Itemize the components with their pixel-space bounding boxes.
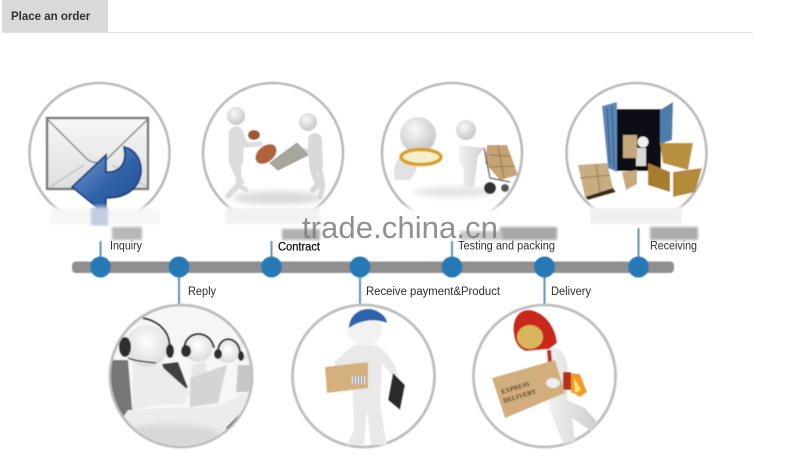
blurred white fade under top circles	[20, 203, 720, 227]
icon: laptops and desk	[123, 364, 251, 446]
icon: jetpack flame	[563, 372, 587, 397]
page header	[2, 0, 753, 32]
icon: document clipboard	[270, 143, 308, 170]
redacted smudges above the labels	[50, 208, 698, 240]
figure: worker with hand truck	[456, 120, 518, 194]
panel: Receive payment circle with courier	[292, 305, 434, 447]
figure: courier	[334, 309, 398, 445]
icon: chairs	[110, 360, 188, 416]
timeline labels: Contract	[278, 242, 321, 254]
figure: agents with headsets	[126, 325, 251, 410]
timeline nodes	[90, 256, 649, 278]
panel: Delivery circle with jetpack courier	[474, 305, 616, 447]
panel: Contract circle with two figures	[203, 83, 343, 223]
timeline labels: Delivery	[551, 286, 591, 298]
icon: red helmet with gold visor	[513, 310, 557, 362]
tab: Place an order: Place an order	[11, 11, 91, 23]
timeline bar	[72, 262, 674, 273]
connector stems	[100, 228, 638, 304]
timeline labels: Testing and packing	[458, 240, 555, 252]
icon: blue reply arrow	[72, 147, 141, 210]
icon: handheld device	[388, 373, 405, 410]
panel: Testing and packing circle	[382, 83, 522, 223]
icon: orange stamp	[248, 130, 280, 168]
timeline labels: Inquiry	[110, 240, 142, 252]
icon: shipping container	[602, 102, 673, 172]
watermark: trade.china.cn	[302, 210, 498, 245]
timeline labels	[110, 240, 697, 298]
icon: parcel	[325, 362, 368, 393]
panel: Receiving circle with container	[566, 83, 706, 223]
figure: right person	[299, 113, 323, 197]
timeline labels: Reply	[188, 286, 216, 298]
icon: express delivery box	[492, 360, 565, 418]
tab: Place an order	[2, 0, 108, 32]
figure: courier hand	[546, 378, 560, 388]
icon: stacked boxes right	[648, 143, 702, 197]
figure: inspector with magnifier	[394, 117, 441, 180]
icon: envelope	[47, 118, 148, 189]
icon: express delivery box: DELIVERY	[503, 388, 537, 405]
panel: Inquiry circle with envelope icon	[30, 83, 170, 223]
timeline labels: Receiving	[650, 240, 697, 252]
figure: worker carrying box	[623, 135, 648, 166]
icon: express delivery box: EXPRESS	[501, 381, 531, 396]
timeline labels: Receive payment&Product	[366, 286, 501, 298]
figure: left person	[227, 107, 260, 196]
figure: running courier	[545, 348, 598, 444]
panel: Reply circle with call centre	[100, 305, 260, 450]
timeline	[72, 228, 674, 304]
icon: stacked boxes left	[578, 163, 637, 200]
